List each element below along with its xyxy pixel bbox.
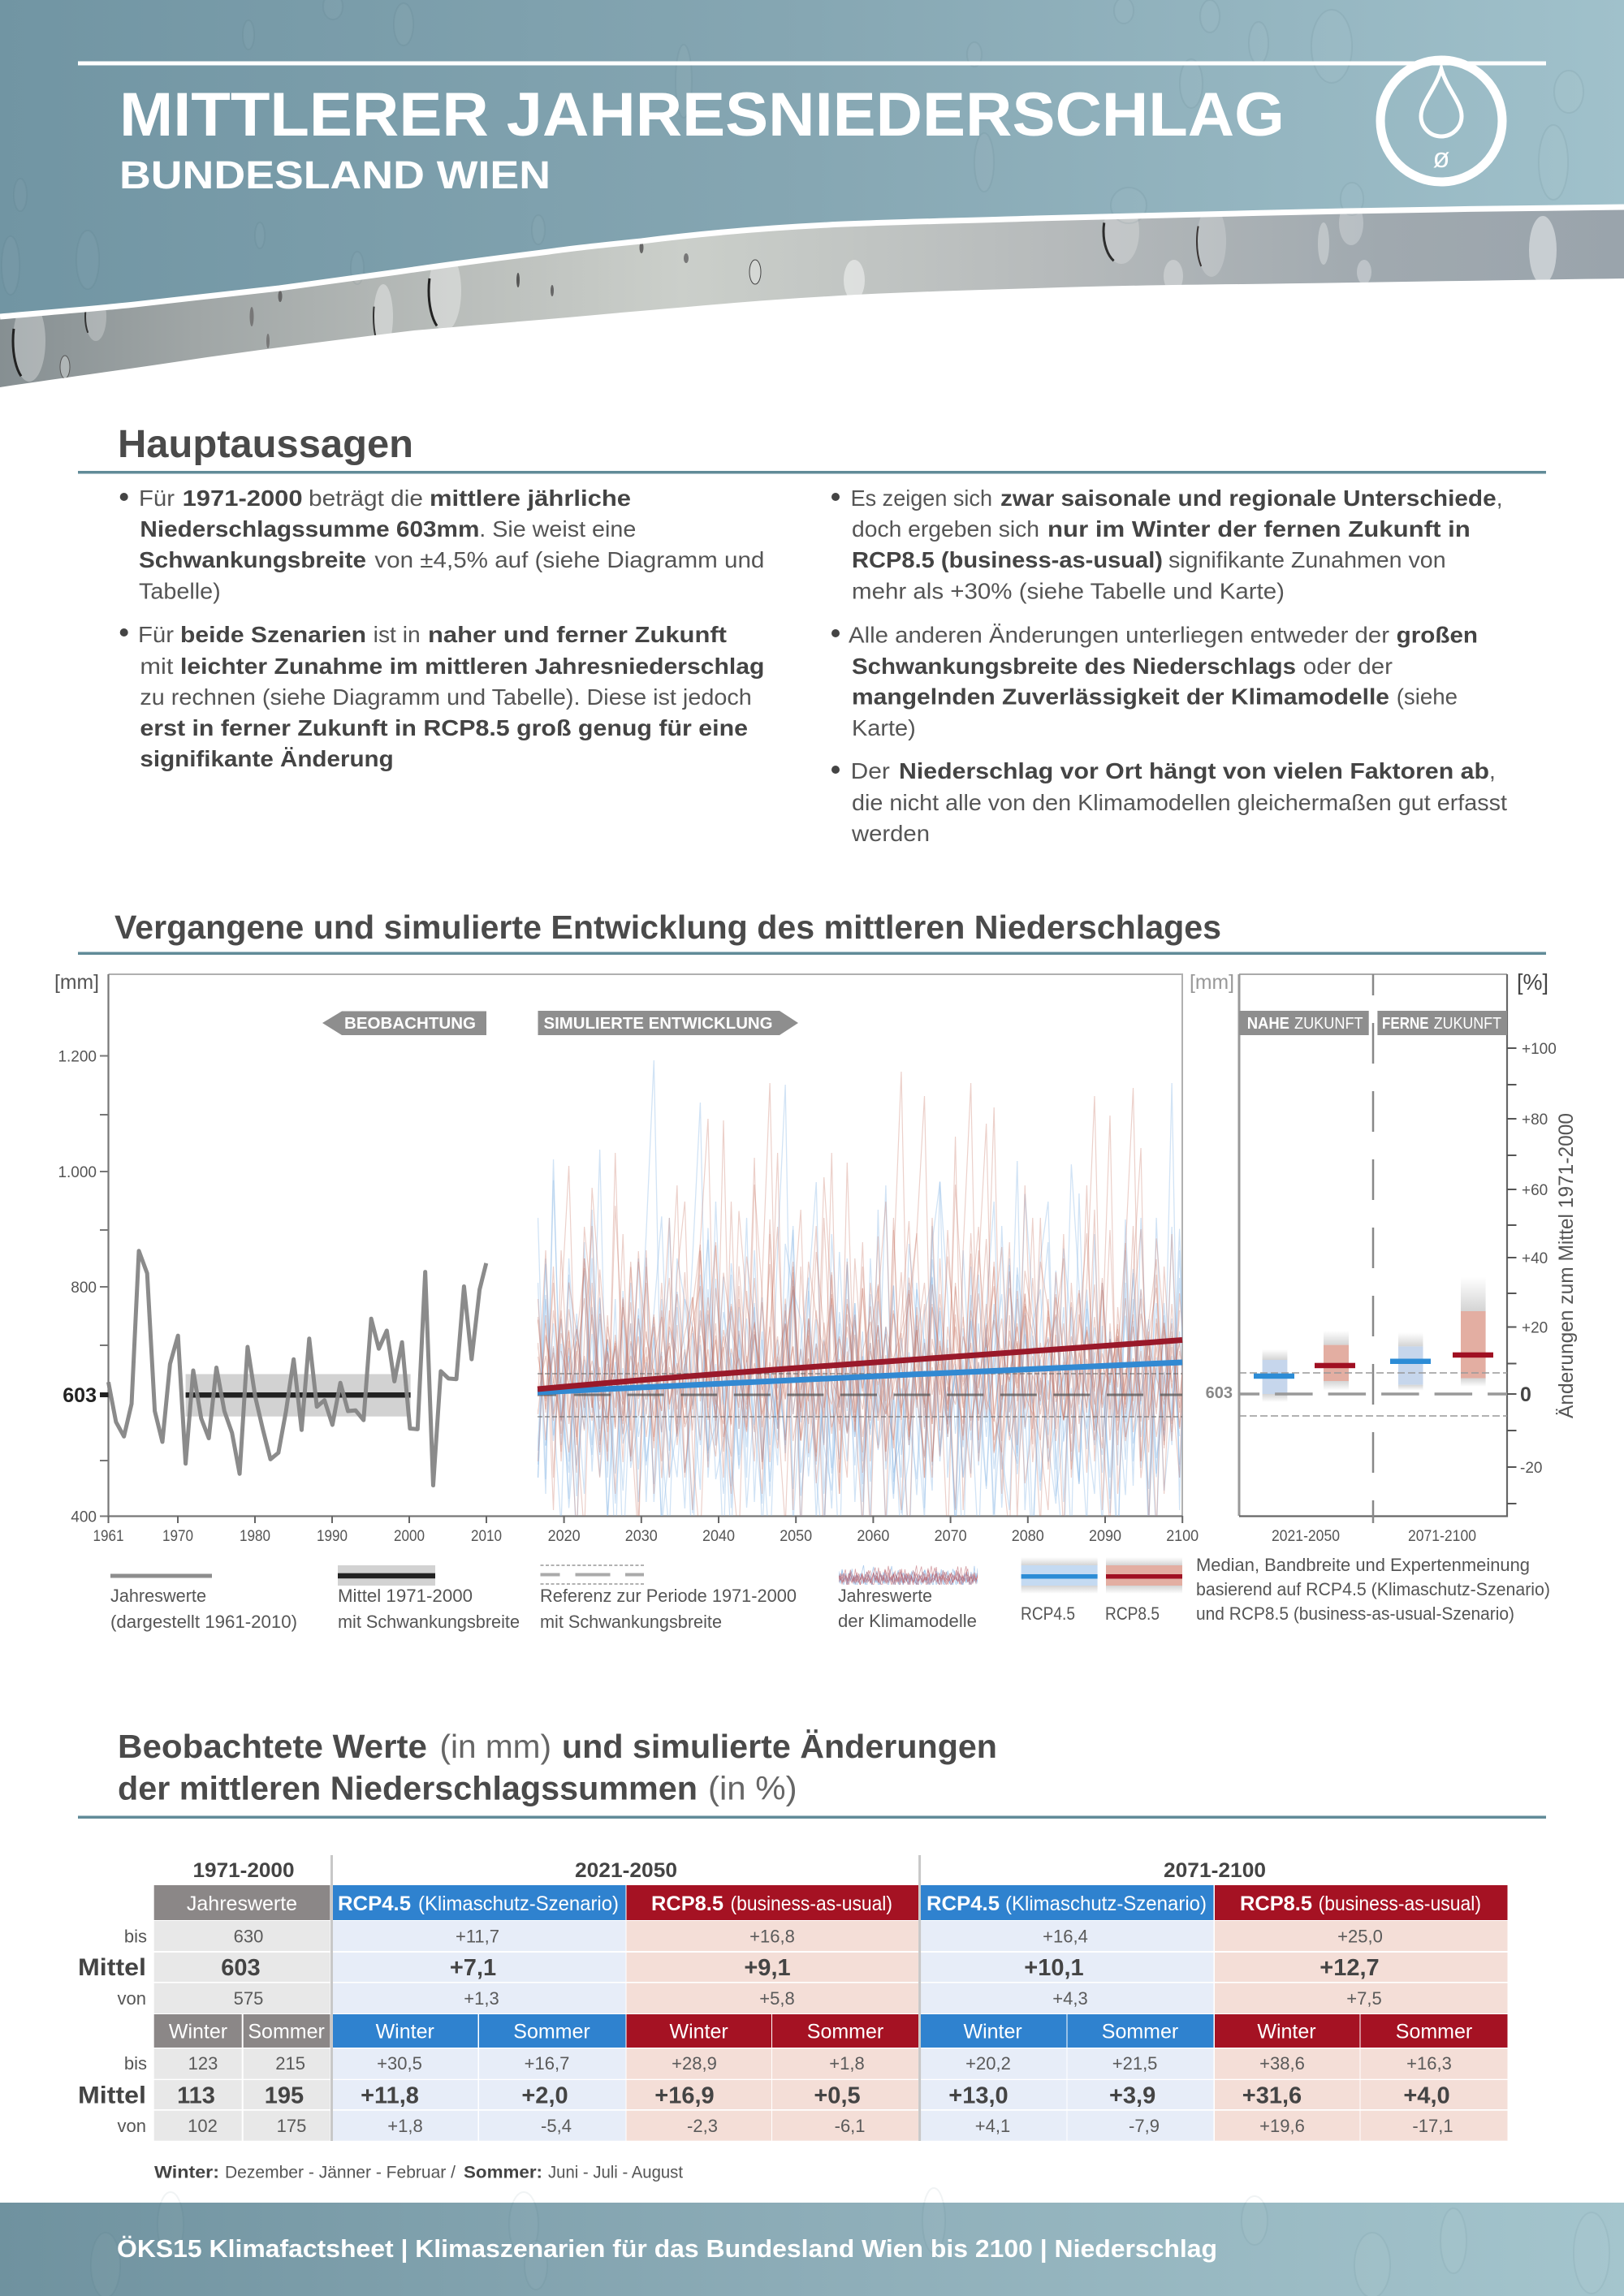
legend: RCP4.5: RCP4.5: [1021, 1603, 1075, 1624]
icon: water drop mean: [1380, 60, 1502, 182]
table seasonal rows: 113: [177, 2083, 215, 2109]
x axis: 1990: [317, 1528, 348, 1545]
table seasonal header row: Winter: [963, 2021, 1022, 2044]
arrow tag: Beobachtung: BEOBACHTUNG: [344, 1015, 476, 1033]
tag: nahe Zukunft: NAHE: [1247, 1015, 1289, 1033]
table annual rows: +9,1: [744, 1955, 791, 1981]
table annual rows: +10,1: [1024, 1955, 1084, 1981]
header blue field: [0, 0, 1624, 315]
y axis: 800: [71, 1280, 97, 1297]
arrow tag: simulierte Entwicklung: [538, 1011, 798, 1035]
table annual rows: +16,8: [749, 1927, 795, 1947]
median RCP4.5 line: [538, 1362, 1182, 1392]
tag: ferne Zukunft: ZUKUNFT: [1434, 1015, 1501, 1033]
right axis: [1507, 1041, 1557, 1504]
table seasonal header row: Sommer: [1102, 2021, 1178, 2044]
line chart: observed and simulated precipitation: [54, 971, 1211, 1567]
table seasonal rows: von: [118, 2116, 146, 2136]
reference lines in panel: [1239, 1373, 1507, 1416]
x axis: 2030: [625, 1528, 658, 1545]
bullet 1 right: RCP8.5 (business-as-usual): [852, 547, 1163, 572]
y axis: [58, 1049, 109, 1526]
bar: RCP4.5 2071-2100: [1398, 1332, 1423, 1391]
table seasonal rows: +16,9: [654, 2083, 715, 2109]
bullet 2 right: mangelnden Zuverlässigkeit der Klimamodelle: [852, 684, 1389, 710]
table seasonal header row: Sommer: [807, 2021, 883, 2044]
legend: Jahreswerte: Jahreswerte: [110, 1586, 206, 1606]
bullet 3 right: [831, 758, 1507, 846]
table seasonal rows: +4,0: [1403, 2083, 1450, 2109]
heading: table section: (in %): [708, 1770, 797, 1807]
x axis: 2040: [702, 1528, 735, 1545]
legend: Referenz: Referenz zur Periode 1971-2000: [540, 1586, 797, 1606]
bullet 1 left: 1971-2000: [183, 486, 303, 511]
table header row: RCP4.5: [338, 1892, 411, 1915]
bullet 1 left: beträgt die: [309, 486, 423, 511]
center divider: [1372, 974, 1374, 1523]
footnote: season definition: Dezember - Jänner - Februar /: [225, 2164, 456, 2182]
table seasonal rows: +21,5: [1112, 2053, 1157, 2074]
right axis: -20: [1520, 1460, 1542, 1477]
icon: water drop mean: ø: [1433, 143, 1449, 174]
table seasonal rows: +28,9: [672, 2053, 717, 2074]
bullet 1 left: Für: [139, 486, 175, 511]
table annual rows: 603: [221, 1955, 261, 1981]
section rule: [78, 1815, 1546, 1819]
table header row: Jahreswerte: [187, 1892, 297, 1915]
table seasonal header row: Winter: [376, 2021, 434, 2044]
bullet 2 left: mit: [140, 654, 174, 679]
right axis: +20: [1522, 1320, 1548, 1336]
legend: RCP8.5: [1105, 1557, 1182, 1624]
table seasonal rows: +11,8: [361, 2083, 419, 2109]
table: observed values and simulated changes: [78, 1855, 1507, 2141]
text block: key statements left: [120, 486, 764, 771]
table header row: (Klimaschutz-Szenario): [1005, 1892, 1207, 1915]
bullet 1 right: doch ergeben sich: [852, 516, 1039, 542]
bullet 1 left: Niederschlagssumme 603mm: [140, 516, 479, 542]
bar: RCP8.5 2071-2100: [1461, 1277, 1486, 1387]
legend: Jahreswerte: (dargestellt 1961-2010): [110, 1612, 297, 1632]
legend: description: und RCP8.5 (business-as-usual-Szenario): [1196, 1603, 1514, 1624]
table annual rows: von: [118, 1988, 146, 2009]
footer text: ÖKS15 Klimafactsheet | Klimaszenarien für das Bundesland Wien bis 2100 | Niederschlag: [117, 2234, 1217, 2263]
table annual rows: [78, 1927, 1383, 2009]
table seasonal rows: +13,0: [948, 2083, 1009, 2109]
table seasonal rows: +16,3: [1406, 2053, 1452, 2074]
table annual rows: +5,8: [759, 1988, 795, 2009]
bullet 2 left: ist in: [374, 622, 421, 647]
heading: Hauptaussagen: Hauptaussagen: [118, 423, 413, 466]
table header row: 1971-2000: [193, 1859, 294, 1882]
x axis: 2000: [394, 1528, 425, 1545]
x axis: 1980: [240, 1528, 270, 1545]
table header row: RCP8.5: [651, 1892, 723, 1915]
table annual rows: +7,5: [1346, 1988, 1382, 2009]
table header row: [154, 1859, 1508, 1920]
bullet 3 right: Der: [851, 758, 890, 783]
table header row: RCP8.5: [1240, 1892, 1312, 1915]
label 603: 603: [1206, 1384, 1233, 1402]
legend: description: basierend auf RCP4.5 (Klimaschutz-Szenario): [1196, 1579, 1550, 1599]
section rule: [78, 471, 1546, 474]
table annual rows: +16,4: [1043, 1927, 1088, 1947]
tag: nahe Zukunft: ZUKUNFT: [1294, 1015, 1363, 1033]
table seasonal header row: Winter: [1257, 2021, 1316, 2044]
table seasonal rows: -7,9: [1129, 2116, 1160, 2136]
x axis: [93, 1516, 1199, 1545]
table header row: (business-as-usual): [1319, 1892, 1481, 1915]
bullet 2 right: großen: [1397, 623, 1478, 648]
bullet 3 right: ,: [1489, 758, 1496, 783]
text block: key statements right: [831, 486, 1507, 846]
panel unit labels: [%]: [1517, 969, 1548, 995]
table seasonal header row: Winter: [169, 2021, 227, 2044]
table seasonal rows: -6,1: [835, 2116, 866, 2136]
bullet 2 right: (siehe: [1397, 684, 1458, 710]
tag: ferne Zukunft: [1377, 1011, 1507, 1035]
table header row: (business-as-usual): [731, 1892, 892, 1915]
median markers: [1254, 1353, 1493, 1379]
bullet 2 right: Alle anderen Änderungen unterliegen entweder der: [849, 623, 1389, 648]
bullet 2 right: oder der: [1303, 654, 1393, 679]
x axis: 1961: [93, 1528, 123, 1545]
x axis: 2100: [1166, 1528, 1199, 1545]
table seasonal header row: [154, 2014, 1508, 2048]
x axis: 2080: [1012, 1528, 1044, 1545]
bullet 1 right: ,: [1497, 486, 1502, 511]
table seasonal rows: +1,8: [387, 2116, 423, 2136]
table seasonal rows: -5,4: [541, 2116, 572, 2136]
bullet 3 right: die nicht alle von den Klimamodellen gleichermaßen gut erfasst: [852, 790, 1507, 815]
bullet 2 left: erst in ferner Zukunft in RCP8.5 groß genug für eine: [140, 715, 748, 740]
droplets on blue field: [2, 0, 1583, 295]
legend: RCP8.5: RCP8.5: [1105, 1603, 1160, 1624]
table annual rows: +25,0: [1337, 1927, 1383, 1947]
legend: description: [1196, 1555, 1550, 1624]
bullet 2 left: beide Szenarien: [180, 622, 366, 647]
observed annual values line: [108, 1251, 486, 1486]
legend: Klimamodelle: [838, 1565, 978, 1631]
y axis: 400: [71, 1508, 97, 1526]
footnote: season definition: Juni - Juli - August: [548, 2164, 683, 2182]
legend: [110, 1555, 1550, 1632]
table cell backgrounds: [154, 1921, 1508, 2141]
bullet 1 left: Schwankungsbreite: [139, 547, 366, 572]
header banner: [0, 0, 1624, 387]
table seasonal rows: +3,9: [1109, 2083, 1155, 2109]
heading: chart section: Vergangene und simulierte Entwicklung des mittleren Niederschlages: [114, 908, 1221, 946]
bullet 1 left: [120, 486, 764, 604]
bullet 2 left: [120, 622, 764, 771]
legend: RCP4.5: [1021, 1557, 1098, 1624]
table seasonal header row: Winter: [669, 2021, 728, 2044]
table seasonal rows: Mittel: [78, 2082, 146, 2109]
table seasonal rows: +31,6: [1242, 2083, 1302, 2109]
table annual rows: +12,7: [1320, 1955, 1380, 1981]
tag: nahe Zukunft: [1239, 1011, 1369, 1035]
legend: Klimamodelle: der Klimamodelle: [838, 1611, 977, 1631]
panel unit labels: [mm]: [1190, 971, 1234, 994]
right axis title: Änderungen zum Mittel 1971-2000: [1555, 1113, 1578, 1418]
table seasonal rows: -2,3: [687, 2116, 718, 2136]
bullet 1 left: von ±4,5% auf (siehe Diagramm und: [374, 547, 764, 572]
period labels: 2021-2050: [1272, 1528, 1340, 1545]
table annual rows: +4,3: [1052, 1988, 1088, 2009]
bullet 2 left: Für: [138, 622, 174, 647]
header grey droplet strip: [0, 195, 1624, 387]
subtitle: BUNDESLAND WIEN: [119, 154, 551, 197]
bullet 1 right: signifikante Zunahmen von: [1168, 547, 1446, 572]
heading: table section: und simulierte Änderungen: [562, 1728, 997, 1765]
table header row: 2071-2100: [1164, 1859, 1266, 1882]
heading: table section: [118, 1728, 997, 1807]
table seasonal header row: Sommer: [513, 2021, 590, 2044]
header rule: [78, 62, 1546, 65]
period labels: [1272, 1528, 1476, 1545]
footnote: season definition: Sommer:: [464, 2164, 542, 2182]
bullet 2 left: zu rechnen (siehe Diagramm und Tabelle). Diese ist jedoch: [140, 684, 752, 710]
legend: Referenz: mit Schwankungsbreite: [540, 1612, 722, 1632]
footer band: [0, 2188, 1624, 2296]
bullet 1 right: [831, 486, 1502, 604]
legend: description: Median, Bandbreite und Expertenmeinung: [1196, 1555, 1530, 1575]
heading: table section: der mittleren Niederschlagssummen: [118, 1770, 698, 1807]
x axis: 2070: [935, 1528, 967, 1545]
bullet 3 right: werden: [851, 821, 930, 846]
legend: Klimamodelle: Jahreswerte: [838, 1586, 932, 1606]
arrow tag: simulierte Entwicklung: SIMULIERTE ENTWICKLUNG: [544, 1015, 773, 1033]
table seasonal rows: +20,2: [965, 2053, 1011, 2074]
arrow tag: Beobachtung: [322, 1012, 486, 1035]
table seasonal rows: +2,0: [521, 2083, 568, 2109]
bullet 1 left: Tabelle): [139, 579, 221, 604]
table seasonal rows: +0,5: [814, 2083, 861, 2109]
bar: RCP8.5 2021-2050: [1324, 1331, 1349, 1391]
right axis: +60: [1522, 1182, 1548, 1199]
right axis: 0: [1520, 1383, 1531, 1406]
table seasonal rows: +38,6: [1259, 2053, 1305, 2074]
table seasonal rows: [78, 2053, 1453, 2136]
legend: Mittel: mit Schwankungsbreite: [338, 1612, 520, 1632]
panel frame: [1239, 974, 1507, 1517]
table header row: 2021-2050: [575, 1859, 677, 1882]
table seasonal rows: 102: [188, 2116, 218, 2136]
panel: future period comparison: [1190, 969, 1578, 1545]
table seasonal rows: bis: [124, 2053, 147, 2074]
bullet 2 right: [831, 623, 1478, 740]
x axis: 2060: [857, 1528, 889, 1545]
period labels: 2071-2100: [1408, 1528, 1476, 1545]
x axis: 1970: [162, 1528, 193, 1545]
table seasonal rows: +1,8: [829, 2053, 865, 2074]
bullet 1 left: mittlere jährliche: [430, 486, 631, 511]
x axis: 2020: [548, 1528, 581, 1545]
x axis: 2090: [1089, 1528, 1121, 1545]
table header row: RCP4.5: [926, 1892, 1000, 1915]
bar: RCP4.5 2021-2050: [1263, 1349, 1287, 1402]
bullet 2 left: signifikante Änderung: [140, 746, 394, 771]
x axis: 2010: [471, 1528, 502, 1545]
y axis: 1.200: [58, 1049, 97, 1065]
table header row: (Klimaschutz-Szenario): [418, 1892, 619, 1915]
table seasonal rows: +16,7: [525, 2053, 569, 2074]
legend: Mittel: [338, 1565, 520, 1632]
table seasonal rows: -17,1: [1412, 2116, 1453, 2136]
table annual rows: 575: [234, 1988, 263, 2009]
bullet 1 left: . Sie weist eine: [479, 516, 636, 542]
y axis: 603: [63, 1384, 97, 1407]
table seasonal rows: 195: [265, 2083, 304, 2109]
table seasonal rows: +4,1: [975, 2116, 1010, 2136]
table annual rows: +7,1: [450, 1955, 496, 1981]
legend: Jahreswerte: [110, 1573, 297, 1632]
bullet 1 right: mehr als +30% (siehe Tabelle und Karte): [852, 579, 1285, 604]
table seasonal rows: 215: [275, 2053, 305, 2074]
droplets on grey strip: [13, 199, 1557, 382]
table annual rows: bis: [124, 1927, 147, 1947]
header white curve: [0, 207, 1624, 317]
table annual rows: 630: [234, 1927, 263, 1947]
title: MITTLERER JAHRESNIEDERSCHLAG: [119, 80, 1285, 149]
footnote: season definition: Winter:: [154, 2164, 219, 2182]
bullet 1 right: nur im Winter der fernen Zukunft in: [1047, 516, 1471, 542]
heading: table section: Beobachtete Werte: [118, 1728, 427, 1765]
table annual rows: +1,3: [464, 1988, 499, 2009]
table annual rows: Mittel: [78, 1954, 146, 1981]
table seasonal rows: 123: [188, 2053, 218, 2074]
y axis: 1.000: [58, 1164, 97, 1181]
bullet 2 left: leichter Zunahme im mittleren Jahresniederschlag: [180, 654, 764, 679]
bullet 1 right: zwar saisonale und regionale Unterschiede: [1000, 486, 1497, 511]
table seasonal rows: +30,5: [377, 2053, 422, 2074]
bullet 2 right: Karte): [852, 715, 916, 740]
right axis: +80: [1522, 1111, 1548, 1129]
heading: table section: (in mm): [440, 1728, 551, 1765]
legend: Mittel: Mittel 1971-2000: [338, 1586, 473, 1606]
y axis unit: [mm]: [54, 971, 99, 994]
table period separators: [331, 1855, 920, 2141]
bullet 2 right: Schwankungsbreite des Niederschlags: [852, 654, 1296, 679]
panel unit labels: [1190, 969, 1548, 995]
footer droplets: [91, 2188, 1609, 2296]
chart frame: [109, 974, 1182, 1517]
footnote: season definition: [154, 2164, 683, 2182]
section rule: [78, 952, 1546, 955]
mean 1971-2000 with band: [186, 1374, 411, 1417]
right axis: +100: [1522, 1041, 1557, 1058]
table seasonal rows: +19,6: [1259, 2116, 1305, 2136]
bullet 3 right: Niederschlag vor Ort hängt von vielen Faktoren ab: [899, 758, 1489, 783]
reference lines in simulation: [538, 1374, 1182, 1417]
right axis: +40: [1522, 1250, 1548, 1267]
simulated model ensemble lines: [538, 1060, 1182, 1516]
legend: Referenz: [540, 1565, 797, 1632]
bullet 1 right: Es zeigen sich: [851, 486, 992, 511]
median RCP8.5 line: [538, 1340, 1182, 1389]
table seasonal header row: Sommer: [248, 2021, 325, 2044]
table seasonal rows: 175: [277, 2116, 306, 2136]
table annual rows: +11,7: [456, 1927, 499, 1947]
tag: ferne Zukunft: FERNE: [1382, 1015, 1429, 1033]
x axis: 2050: [780, 1528, 812, 1545]
bullet 2 left: naher und ferner Zukunft: [428, 622, 727, 647]
table seasonal header row: Sommer: [1396, 2021, 1472, 2044]
